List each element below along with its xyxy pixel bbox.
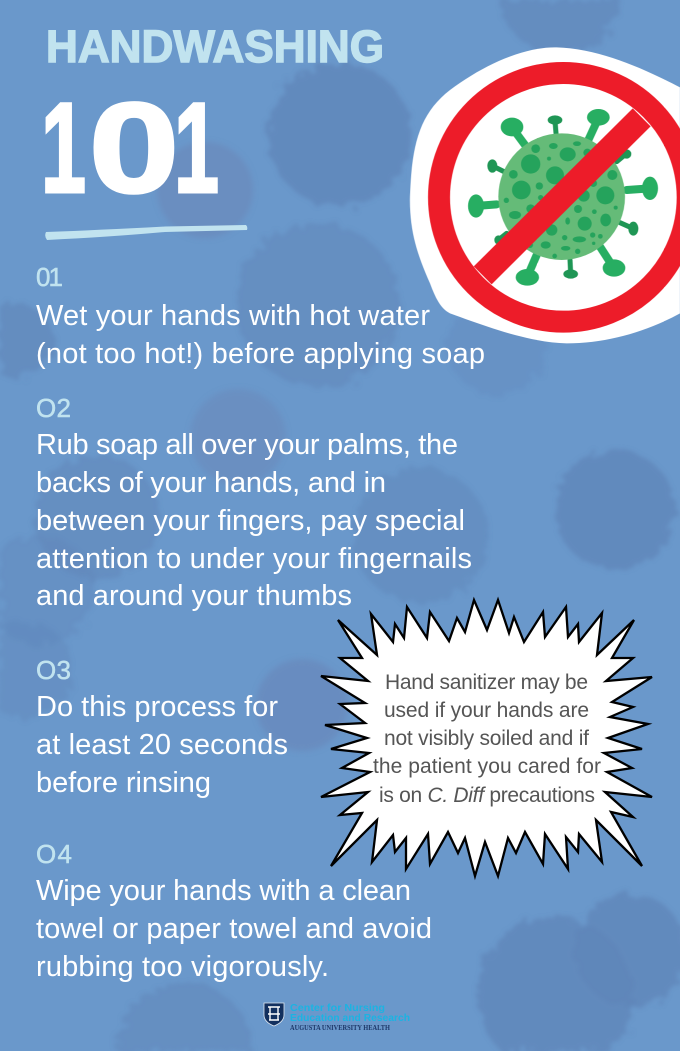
footer logo xyxy=(264,1002,410,1032)
step 02: attention to under your fingernails xyxy=(36,543,472,575)
white sticker backing xyxy=(410,47,680,343)
virus xyxy=(468,109,658,286)
footer logo: AUGUSTA UNIVERSITY HEALTH xyxy=(290,1025,391,1032)
step 04: Wipe your hands with a clean xyxy=(36,875,411,907)
step 02: and around your thumbs xyxy=(36,580,352,612)
step 03: at least 20 seconds xyxy=(36,729,288,761)
step 03 xyxy=(36,655,288,799)
step 04: O4 xyxy=(36,839,72,869)
callout: hand sanitizer burst: used if your hands are xyxy=(384,699,589,722)
callout: hand sanitizer burst: not visibly soiled and if xyxy=(384,727,589,750)
step 01: Wet your hands with hot water xyxy=(36,300,430,332)
step 04 xyxy=(36,839,432,983)
callout: hand sanitizer burst xyxy=(321,600,652,876)
footer logo: Education and Research xyxy=(290,1012,410,1024)
step 03: Do this process for xyxy=(36,691,278,723)
step 04: rubbing too vigorously. xyxy=(36,951,329,983)
title: 101: 0 xyxy=(89,77,179,220)
title: 101: 1 xyxy=(174,77,219,220)
step 03: O3 xyxy=(36,655,71,685)
prohibition ring xyxy=(439,73,680,322)
icon: no virus sign xyxy=(410,47,680,343)
title: 101: 1 xyxy=(41,77,86,220)
step 02: Rub soap all over your palms, the xyxy=(36,429,458,461)
step 02: backs of your hands, and in xyxy=(36,467,386,499)
step 02 xyxy=(36,393,472,612)
callout: hand sanitizer burst: Hand sanitizer may be xyxy=(385,671,588,694)
title: handwashing: HANDWASHING xyxy=(46,21,384,72)
callout: hand sanitizer burst: is on C. Diff precautions xyxy=(379,784,595,807)
footer logo: Center for Nursing xyxy=(290,1002,385,1014)
step 01: 01 xyxy=(36,262,63,292)
step 01: (not too hot!) before applying soap xyxy=(36,338,485,370)
icon: university shield xyxy=(264,1003,284,1026)
title underline xyxy=(45,225,247,240)
title: 101 xyxy=(41,77,219,220)
step 04: towel or paper towel and avoid xyxy=(36,913,432,945)
step 03: before rinsing xyxy=(36,767,211,799)
step 02: between your fingers, pay special xyxy=(36,505,465,537)
step 02: O2 xyxy=(36,393,71,423)
step 01 xyxy=(36,262,485,370)
callout: hand sanitizer burst: the patient you cared for xyxy=(373,755,601,778)
